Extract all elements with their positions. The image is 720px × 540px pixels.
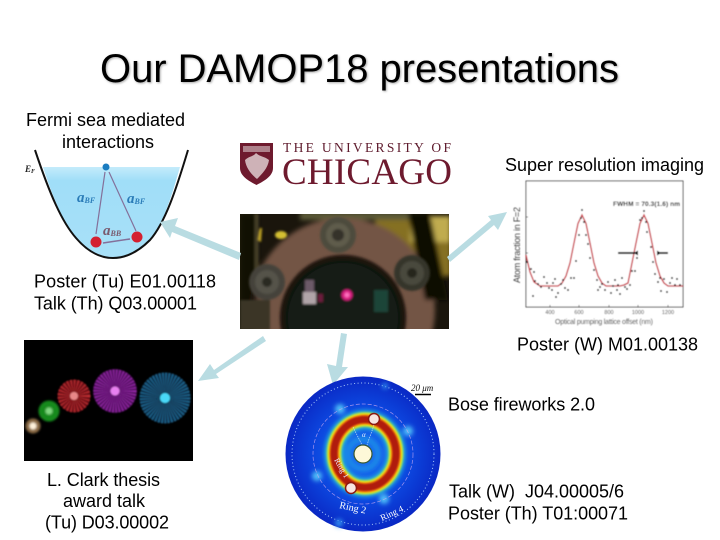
- chart: Bose fireworks ring density: 20 μm: [411, 383, 434, 393]
- text: Bose talk and poster: Poster (Th) T01:00071: [448, 504, 628, 524]
- diagram: Fermi sea parabola: a: [127, 191, 134, 207]
- text: Fermi poster and talk: [34, 272, 216, 314]
- title: Our DAMOP18 presentations: [100, 47, 619, 91]
- text: Super resolution imaging: Super resolution imaging: [505, 155, 704, 175]
- chart: Bose fireworks ring density: Ring 4: [379, 503, 405, 523]
- chart: atom fraction vs lattice offset: 400: [545, 310, 555, 316]
- chart: atom fraction vs lattice offset: [512, 181, 683, 326]
- image: fireworks: [24, 340, 193, 461]
- firework: blue: [140, 372, 190, 424]
- diagram: Fermi sea parabola: a: [103, 223, 110, 239]
- diagram: Fermi sea parabola: E: [25, 164, 31, 174]
- chart: atom fraction vs lattice offset: 600: [574, 310, 584, 316]
- text: Fermi poster and talk: Talk (Th) Q03.00001: [34, 294, 197, 314]
- heading: Fermi sea mediated interactions: [26, 110, 185, 152]
- chart: Bose fireworks ring density: Ring 1: [332, 456, 351, 480]
- firework: purple: [93, 369, 137, 413]
- chart: Bose fireworks ring density: [286, 376, 440, 532]
- diagram: Fermi sea parabola: [24, 150, 188, 258]
- arrow: to Bose ring: [327, 333, 348, 385]
- icon: shield: [240, 143, 273, 185]
- text: L. Clark thesis award talk: (Tu) D03.00002: [45, 512, 169, 532]
- title: Our DAMOP18 presentations: [101, 48, 620, 92]
- diagram: Fermi sea parabola: a: [77, 190, 84, 206]
- text: super resolution poster: Poster (W) M01.00138: [517, 334, 698, 354]
- data points: [527, 210, 680, 297]
- logo: University of Chicago: [240, 140, 452, 193]
- text: Fermi poster and talk: Poster (Tu) E01.00118: [34, 272, 216, 292]
- chart: atom fraction vs lattice offset: Atom fraction in F=2: [512, 207, 522, 283]
- chart: Bose fireworks ring density: Ring 2: [338, 500, 367, 517]
- firework: green: [38, 400, 60, 422]
- water fill: [43, 167, 180, 258]
- heading: Fermi sea mediated interactions: Fermi sea mediated: [26, 110, 185, 130]
- firework: red: [58, 380, 90, 412]
- text: L. Clark thesis award talk: L. Clark thesis: [47, 470, 160, 490]
- text: Bose talk and poster: [448, 482, 628, 524]
- logo: University of Chicago: THE UNIVERSITY OF: [283, 140, 451, 155]
- chart: atom fraction vs lattice offset: Optical pumping lattice offset (nm): [555, 319, 653, 326]
- arrow: to super resolution plot: [447, 212, 507, 262]
- firework: white: [26, 418, 40, 434]
- FWHM arrows: [618, 252, 668, 254]
- text: Bose talk and poster: Talk (W) J04.00005/6: [449, 482, 624, 502]
- photo: vacuum chamber: [240, 214, 449, 329]
- text: Bose fireworks 2.0: Bose fireworks 2.0: [448, 394, 595, 414]
- arrow: to Fermi sea diagram: [160, 218, 241, 260]
- text: L. Clark thesis award talk: award talk: [63, 491, 146, 511]
- arrow: to fireworks: [198, 336, 266, 381]
- chart: atom fraction vs lattice offset: 1000: [632, 310, 644, 316]
- diagram: Fermi sea parabola: F: [31, 169, 35, 175]
- chart: Bose fireworks ring density: α: [362, 431, 366, 439]
- logo: University of Chicago: CHICAGO: [282, 152, 452, 193]
- diagram: Fermi sea parabola: BF: [134, 197, 146, 206]
- fit curve: [526, 215, 683, 286]
- text: L. Clark thesis award talk: [45, 470, 169, 532]
- chart: atom fraction vs lattice offset: 1200: [662, 310, 674, 316]
- diagram: Fermi sea parabola: BB: [110, 229, 122, 238]
- heading: Fermi sea mediated interactions: interactions: [62, 132, 154, 152]
- chart: atom fraction vs lattice offset: FWHM = 70.3(1.6) nm: [613, 201, 680, 208]
- diagram: Fermi sea parabola: BF: [84, 196, 96, 205]
- chart: atom fraction vs lattice offset: 800: [604, 310, 614, 316]
